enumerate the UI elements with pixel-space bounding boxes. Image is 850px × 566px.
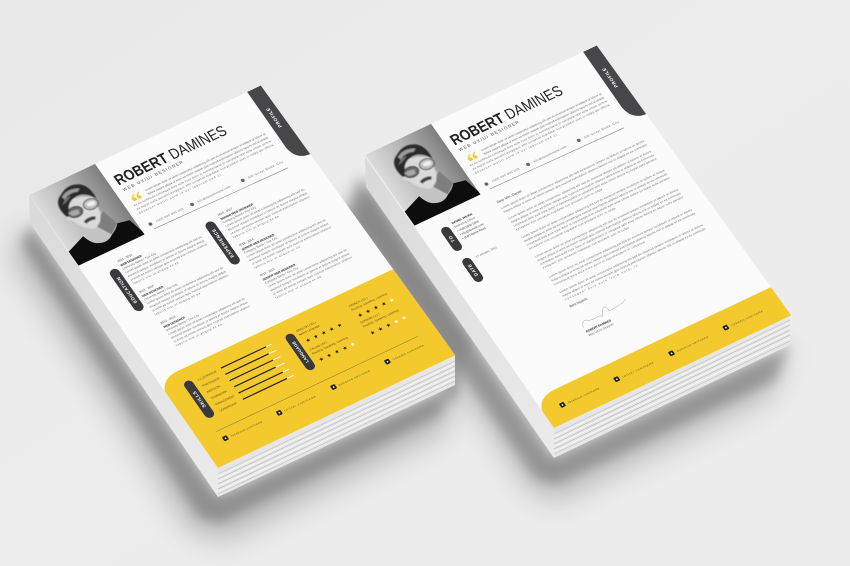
language ratings: ★ bbox=[388, 296, 396, 304]
language ratings: Reading, Speaking, Listening bbox=[362, 308, 400, 328]
experience entries: laboris nisi ut aliquip ex ea bbox=[274, 275, 322, 300]
pill: language bbox=[286, 334, 315, 370]
education entries: University Name / Your City bbox=[143, 282, 179, 301]
language ratings bbox=[296, 293, 406, 362]
profile paragraph: eu fugiat nulla pariatur excepteur sint occaecat cupidatat non proident sunt in culpa qui officia bbox=[471, 103, 611, 171]
skill labels: ILLUSTRATOR bbox=[197, 369, 218, 382]
portrait photo bbox=[29, 163, 145, 266]
pill: date: DATE bbox=[467, 263, 479, 277]
language ratings: ITALIAN ( A2 ) bbox=[308, 340, 328, 352]
experience entries: Company Name / Your City bbox=[222, 205, 257, 224]
education entries: University Name / Your City bbox=[165, 313, 200, 332]
language ratings: ★★ bbox=[392, 314, 409, 326]
sign-off: Best regards bbox=[569, 297, 589, 308]
footer contacts bbox=[559, 308, 764, 408]
shadow: left stack bbox=[10, 223, 460, 542]
contact row: +000 000 000 000 bbox=[491, 167, 520, 183]
pill: experience bbox=[206, 222, 240, 264]
education entries: eiusmod tempor incididunt ut labore et dolore magna aliqua bbox=[148, 269, 227, 309]
letter body: magna aliqua ut enim ad minim veniam quis nostrud exercitation ullamco laboris nisi ut aliquip ex ea commodo bbox=[550, 211, 696, 282]
subheading: role: WEB UX/UI DESIGNER bbox=[122, 159, 185, 192]
experience entries: Company Name / Your City bbox=[243, 236, 278, 255]
letter body: Lorem ipsum dolor sit amet consectetur adipiscing elit sed do eiusmod tempor incididunt ut labore et dolore bbox=[500, 139, 645, 210]
education entries: ut enim ad minim veniam quis nostrud exercitation ullamco bbox=[173, 304, 251, 343]
education entries: WEB DESIGNER bbox=[162, 315, 187, 329]
contact row: info@domainname.com bbox=[196, 185, 232, 203]
education entries: ut enim ad minim veniam quis nostrud exercitation ullamco bbox=[151, 273, 230, 313]
education entries: eiusmod tempor incididunt ut labore et dolore magna aliqua bbox=[170, 300, 249, 340]
pill: education bbox=[110, 268, 144, 312]
pill: to: TO bbox=[447, 235, 456, 243]
education entries: 2013 - 2014 bbox=[138, 284, 155, 294]
recipient block: • +000 0000 0000 bbox=[456, 219, 480, 233]
contact row: 000 Street Name, City bbox=[247, 160, 284, 179]
recipient block bbox=[452, 213, 486, 239]
letter body: excepteur sint occaecat cupidatat non proident sunt in culpa bbox=[542, 226, 630, 270]
tab label: profile: PROFILE bbox=[601, 67, 619, 88]
profile paragraph: ex ea commodo consequat duis aute irure dolor in reprehenderit in voluptate velit esse cillum dolore bbox=[133, 139, 272, 207]
language ratings: Reading, Speaking, Listening bbox=[350, 292, 388, 312]
profile paragraph: eu fugiat nulla pariatur excepteur sint occaecat cupidatat non proident sunt in culpa qui officia bbox=[135, 143, 275, 211]
footer contacts: linkedin.com/name bbox=[392, 343, 425, 361]
contact row bbox=[484, 120, 624, 191]
experience entries: 2013 - 2014 bbox=[238, 237, 255, 247]
pill: skills bbox=[184, 380, 214, 418]
letter body: excepteur sint occaecat cupidatat non proident sunt in culpa bbox=[515, 187, 603, 231]
contact row bbox=[148, 160, 288, 231]
education entries: Lorem ipsum dolor sit amet consectetur adipiscing elit sed do bbox=[124, 235, 203, 274]
footer contacts: facebook.com/name bbox=[230, 420, 263, 438]
yellow footer panel bbox=[156, 267, 459, 470]
education entries: University Name / Your City bbox=[122, 251, 157, 271]
experience entries: laboris nisi ut aliquip ex ea bbox=[232, 214, 280, 239]
education entries: 2014 - 2015 bbox=[116, 253, 134, 263]
education entries: laboris nisi ut aliquip ex ea bbox=[154, 291, 201, 316]
language ratings: Reading, Speaking, Listening bbox=[311, 336, 349, 356]
language ratings: FRENCH ( B1 ) bbox=[348, 296, 369, 308]
language ratings: GERMAN ( A1 ) bbox=[359, 312, 381, 325]
experience entries: eiusmod tempor incididunt ut labore et dolore magna aliqua bbox=[248, 221, 330, 262]
profile paragraph: deserunt mollit anim id est laborum sed ut bbox=[138, 173, 222, 215]
yellow footer panel bbox=[532, 286, 795, 430]
experience entries: 2012 - 2013 bbox=[259, 267, 276, 277]
language ratings: ★★★★★ bbox=[304, 322, 344, 344]
footer contacts: twitter.com/name bbox=[283, 395, 317, 412]
education entries: laboris nisi ut aliquip ex ea bbox=[175, 322, 223, 347]
letter body: consequat duis aute irure dolor in reprehenderit in voluptate bbox=[553, 240, 646, 286]
experience entries: eiusmod tempor incididunt ut labore et dolore magna aliqua bbox=[227, 191, 308, 232]
sheet surface bbox=[375, 52, 770, 410]
contact row: info@domainname.com bbox=[532, 145, 568, 163]
contact row: 000 Street Name, City bbox=[583, 120, 620, 139]
profile paragraph: deserunt mollit anim id est laborum sed ut bbox=[474, 133, 558, 175]
icon: quote mark: “ bbox=[462, 148, 488, 174]
profile paragraph: dolore magna aliqua ut enim ad minim veniam quis nostrud exercitation ullamco laboris nisi ut aliquip bbox=[482, 95, 605, 156]
skill labels: PHOTOSHOP bbox=[201, 376, 221, 388]
education entries bbox=[117, 236, 250, 346]
experience entries: 2014 - 2017 bbox=[217, 207, 234, 217]
recipient block: Marketing Officer bbox=[453, 216, 476, 229]
portrait photo bbox=[365, 123, 481, 226]
experience entries: ut enim ad minim veniam quis nostrud exercitation ullamco bbox=[272, 255, 353, 296]
letter body: consequat duis aute irure dolor in reprehenderit in voluptate velit esse cillum dolore eu fugiat nulla pariatur bbox=[539, 195, 684, 266]
footer contacts bbox=[222, 343, 425, 441]
pill: language: LANGUAGE bbox=[291, 340, 310, 364]
footer contacts: behance.net/name bbox=[676, 335, 709, 353]
profile tab bbox=[583, 46, 646, 116]
right paper stack sides bbox=[365, 157, 790, 458]
education entries: WEB DESIGNER bbox=[141, 284, 165, 298]
letter body: magna aliqua ut enim ad minim veniam quis nostrud exercitation ullamco laboris nisi ut aliquip ex ea commodo bbox=[561, 227, 707, 298]
experience entries: laboris nisi ut aliquip ex ea bbox=[253, 245, 301, 270]
experience entries: SENIOR WEB DESIGNER bbox=[241, 233, 276, 251]
letter body: magna aliqua ut enim ad minim veniam quis nostrud exercitation ullamco laboris nisi ut aliquip ex ea commodo bbox=[510, 153, 655, 224]
profile paragraph: ex ea commodo consequat duis aute irure dolor in reprehenderit in voluptate velit esse cillum dolore bbox=[469, 99, 608, 167]
signer: Web UX/UI Designer bbox=[588, 322, 615, 337]
sheet surface bbox=[29, 92, 455, 391]
left paper stack sides bbox=[29, 195, 455, 497]
education entries: 2012 - 2013 bbox=[160, 315, 177, 325]
letter salutation: Dear Mrs. Daniel bbox=[496, 189, 523, 204]
footer contacts: behance.net/name bbox=[338, 369, 371, 387]
footer contacts: twitter.com/name bbox=[621, 361, 655, 379]
pill: experience: EXPERIENCE bbox=[211, 228, 235, 258]
heading: name: ROBERT DAMINES bbox=[447, 83, 566, 149]
education entries: eiusmod tempor incididunt ut labore et dolore magna aliqua bbox=[127, 239, 205, 278]
education entries: ut enim ad minim veniam quis nostrud exercitation ullamco bbox=[129, 242, 208, 282]
experience entries bbox=[217, 188, 352, 299]
letter body: Lorem ipsum dolor sit amet consectetur adipiscing elit sed do eiusmod tempor incididunt ut labore et dolore bbox=[559, 223, 704, 294]
language ratings: ★★★★ bbox=[356, 300, 388, 319]
icon: quote mark: “ bbox=[126, 188, 152, 214]
letter body: Lorem ipsum dolor sit amet consectetur adipiscing elit sed do eiusmod tempor incididunt ut labore et dolore bbox=[520, 168, 666, 239]
footer contacts: facebook.com/name bbox=[567, 386, 600, 404]
left sheet: resume bbox=[26, 82, 459, 470]
education entries: Lorem ipsum dolor sit amet consectetur adipiscing elit sed do bbox=[146, 266, 224, 305]
experience entries: Lorem ipsum dolor sit amet consectetur adipiscing elit sed do bbox=[267, 248, 348, 288]
letter date: 14 January, 2022 bbox=[475, 245, 498, 259]
recipient block: • 0000 Name Road bbox=[461, 226, 487, 240]
recipient block: DANIEL WILICK bbox=[451, 212, 474, 225]
education entries: Lorem ipsum dolor sit amet consectetur adipiscing elit sed do bbox=[167, 297, 246, 336]
letter body: Lorem ipsum dolor sit amet consectetur adipiscing elit sed do eiusmod tempor incididunt ut labore et dolore bbox=[507, 149, 653, 220]
profile paragraph: Lorem ipsum dolor sit amet consectetur adipiscing elit sed do eiusmod tempor incididunt ut labore et bbox=[144, 132, 267, 192]
contact row: +000 000 000 000 bbox=[155, 207, 184, 223]
language ratings: ENGLISH ( B1 ) bbox=[295, 321, 317, 333]
letter body: consequat duis aute irure dolor in reprehenderit in voluptate velit esse cillum dolore eu fugiat nulla pariatur bbox=[525, 176, 671, 247]
experience entries: ut enim ad minim veniam quis nostrud exercitation ullamco bbox=[230, 195, 311, 235]
recipient block: • info@domain.com bbox=[459, 222, 485, 237]
letter body: consequat duis aute irure dolor in reprehenderit in voluptate velit esse cillum dolore eu fugiat nulla pariatur bbox=[512, 157, 658, 228]
pill: date bbox=[462, 258, 484, 282]
language ratings: ★★★ bbox=[369, 322, 393, 337]
skill labels: TEAMWORK bbox=[210, 389, 228, 400]
letter body: consequat duis aute irure dolor in bbox=[564, 264, 639, 301]
footer divider bbox=[216, 336, 418, 432]
education entries: WEB DESIGNER bbox=[119, 254, 144, 267]
language ratings: ★ bbox=[349, 341, 357, 348]
letter body: excepteur sint occaecat cupidatat non proident sunt in culpa bbox=[528, 206, 617, 250]
right sheet: cover letter bbox=[362, 42, 795, 430]
experience entries: ut enim ad minim veniam quis nostrud exercitation ullamco bbox=[251, 225, 332, 266]
skill labels: INDESIGN bbox=[205, 385, 221, 394]
skill labels bbox=[198, 370, 236, 412]
letter body bbox=[500, 139, 709, 301]
tab label: profile: PROFILE bbox=[265, 107, 283, 128]
letter body: magna aliqua ut enim ad minim veniam quis nostrud exercitation ullamco laboris nisi ut aliquip ex ea commodo bbox=[502, 143, 648, 214]
letter body: Lorem ipsum dolor sit amet consectetur adipiscing elit sed do eiusmod tempor incididunt ut labore et dolore bbox=[534, 188, 679, 259]
shadow: right stack bbox=[335, 175, 790, 502]
pill: skills: SKILLS bbox=[191, 390, 207, 408]
footer contacts: linkedin.com/name bbox=[730, 309, 764, 327]
experience entries: Lorem ipsum dolor sit amet consectetur adipiscing elit sed do bbox=[224, 187, 306, 228]
profile paragraph: dolore magna aliqua ut enim ad minim veniam quis nostrud exercitation ullamco laboris nisi ut aliquip bbox=[146, 135, 269, 196]
experience entries: SENIOR WEB DESIGNER bbox=[262, 263, 297, 281]
letter body: magna aliqua ut enim ad minim veniam quis nostrud exercitation ullamco laboris nisi ut aliquip ex ea commodo bbox=[536, 191, 682, 262]
language ratings: Native Language bbox=[298, 324, 321, 337]
skill labels: MANAGEMENT bbox=[214, 394, 236, 406]
skill labels: LEADERSHIP bbox=[218, 401, 238, 413]
language ratings: ★★★★ bbox=[317, 344, 349, 363]
pill: education: EDUCATION bbox=[115, 276, 138, 304]
letter body: magna aliqua ut enim ad minim veniam quis nostrud exercitation ullamco laboris nisi ut aliquip ex ea commodo bbox=[523, 172, 668, 243]
profile paragraph: Lorem ipsum dolor sit amet consectetur adipiscing elit sed do eiusmod tempor incididunt ut labore et bbox=[480, 92, 603, 152]
signer: ROBERT DAMINES bbox=[585, 319, 612, 333]
experience entries: Company Name / Your City bbox=[264, 266, 299, 285]
experience entries: Lorem ipsum dolor sit amet consectetur adipiscing elit sed do bbox=[246, 218, 327, 258]
subheading: role: WEB UX/UI DESIGNER bbox=[458, 119, 521, 152]
pill: to bbox=[441, 226, 462, 251]
letter body: Lorem ipsum dolor sit amet consectetur adipiscing elit sed do eiusmod tempor incididunt ut labore et dolore bbox=[548, 208, 693, 279]
signature bbox=[578, 297, 630, 328]
profile tab bbox=[247, 86, 310, 156]
education entries: laboris nisi ut aliquip ex ea bbox=[132, 261, 180, 285]
heading: name: ROBERT DAMINES bbox=[111, 123, 230, 189]
experience entries: SENIOR WEB DESIGNER bbox=[219, 202, 255, 221]
experience entries: eiusmod tempor incididunt ut labore et dolore magna aliqua bbox=[269, 252, 351, 292]
skill bars chart bbox=[221, 344, 294, 399]
